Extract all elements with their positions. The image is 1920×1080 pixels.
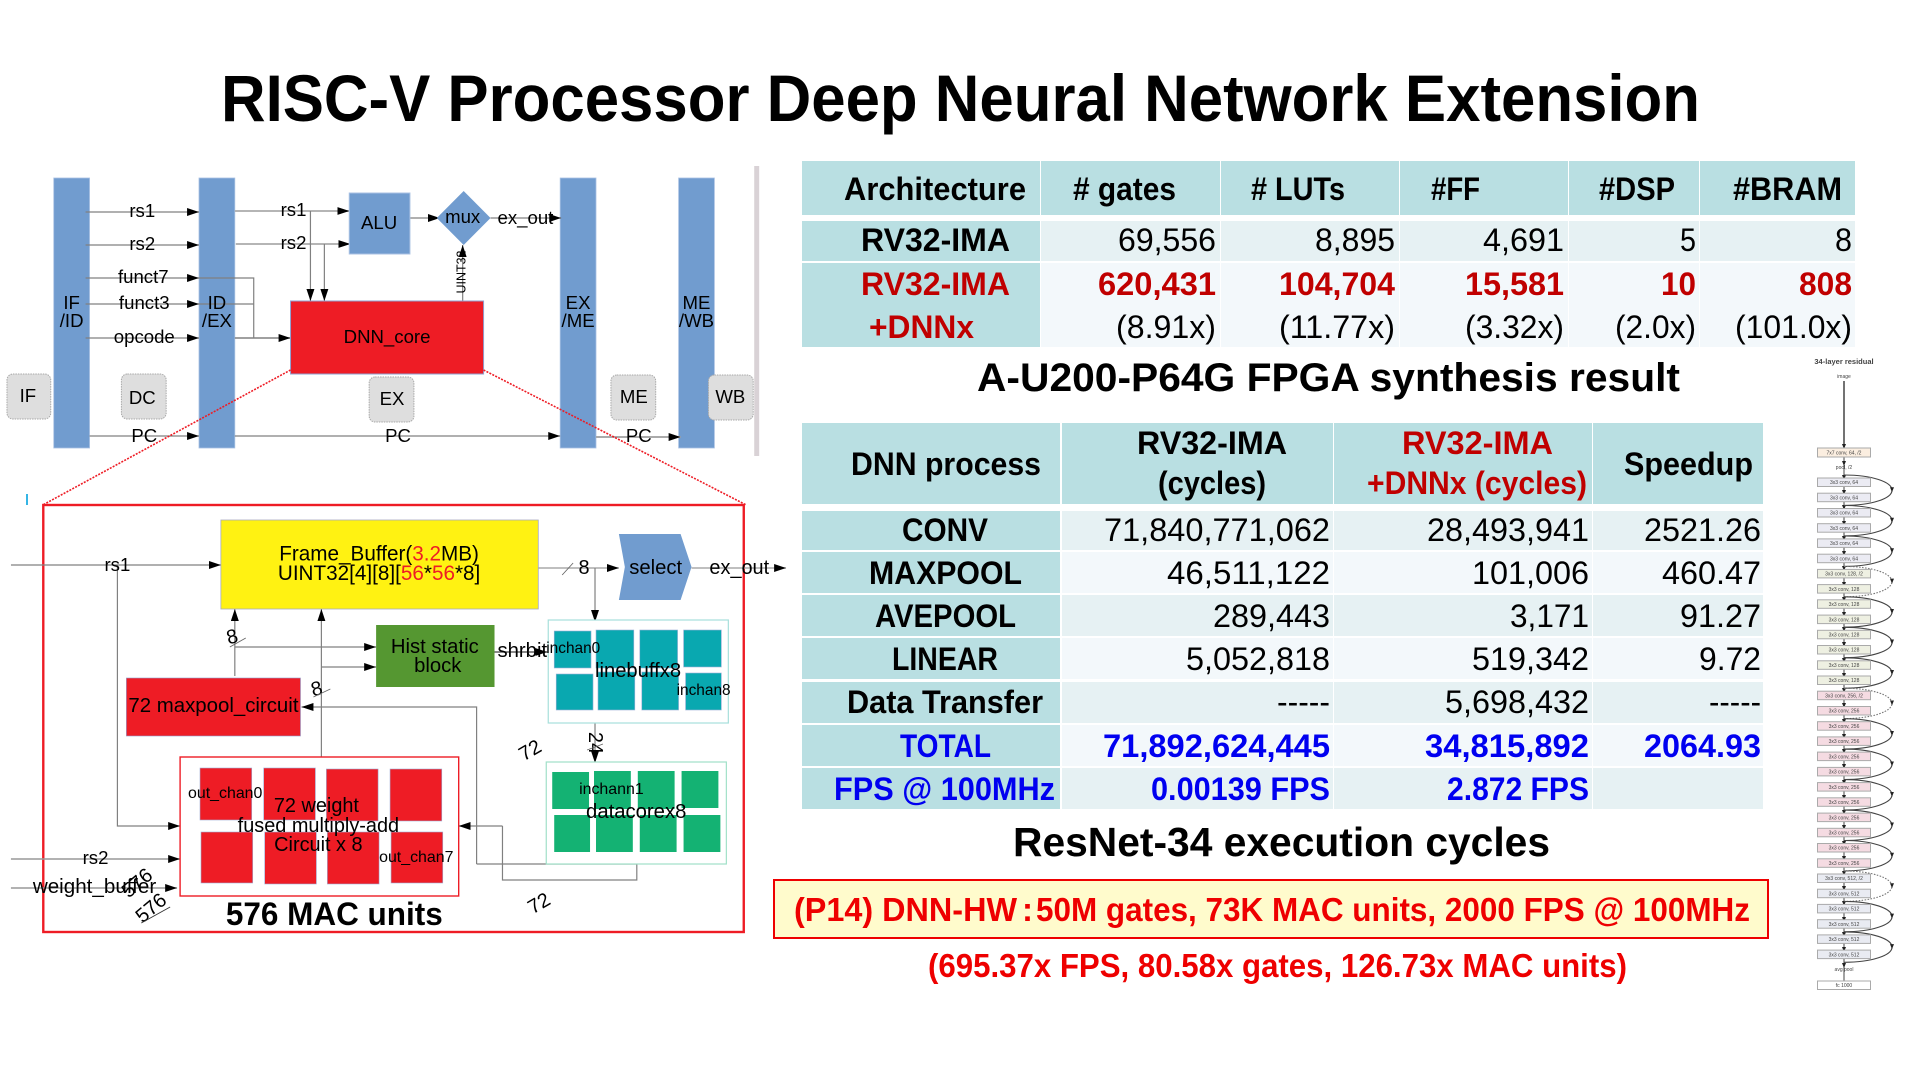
header text: # LUTs <box>1251 171 1345 207</box>
header text: +DNNx (cycles) <box>1367 465 1587 501</box>
hist static block: Hist static <box>391 636 479 658</box>
linebuff group: inchan0 <box>546 640 600 657</box>
speedup column: ----- <box>1709 684 1761 720</box>
RV32-IMA +DNNx row: RV32-IMA <box>861 266 1010 302</box>
ALU block <box>349 193 410 254</box>
pipeline labels: /WB <box>679 310 714 331</box>
pipeline labels: funct7 <box>118 266 169 287</box>
pipeline labels: rs2 <box>281 232 306 253</box>
resnet layer boxes: 3x3 conv, 256 <box>1829 800 1860 806</box>
RV32-IMA cycles column: 0.00139 FPS <box>1151 771 1330 807</box>
linebuff group: linebuffx8 <box>595 660 681 682</box>
resnet layer boxes: 3x3 conv, 256 <box>1829 830 1860 836</box>
shrbit label: shrbit <box>497 640 547 662</box>
DNNx cycles column: 101,006 <box>1472 555 1589 591</box>
hist static block <box>376 625 495 687</box>
outer red frame <box>43 505 744 932</box>
RV32-IMA row: RV32-IMA <box>861 222 1010 258</box>
row labels: LINEAR <box>892 641 998 677</box>
RV32-IMA +DNNx row: (2.0x) <box>1615 309 1696 345</box>
RV32-IMA cycles column: 5,052,818 <box>1186 641 1330 677</box>
body cells <box>1062 511 1763 809</box>
table header row <box>802 423 1763 504</box>
datacore group: datacorex8 <box>586 801 686 823</box>
pipeline labels: IF <box>63 292 80 313</box>
header text: #BRAM <box>1733 171 1842 207</box>
RV32-IMA row <box>861 222 1852 258</box>
header text: DNN process <box>851 446 1041 482</box>
pipeline labels: PC <box>131 425 157 446</box>
RV32-IMA row: 4,691 <box>1483 222 1564 258</box>
stage badges <box>7 374 753 422</box>
table header row <box>802 161 1855 215</box>
resnet layer boxes: 3x3 conv, 512 <box>1829 891 1860 897</box>
resnet layer boxes: 3x3 conv, 128 <box>1829 587 1860 593</box>
pipeline labels: ex_out <box>497 207 554 229</box>
RV32-IMA row: 8,895 <box>1315 222 1395 258</box>
row labels: FPS @ 100MHz <box>834 771 1055 807</box>
resnet layer boxes: 3x3 conv, 64 <box>1830 541 1858 547</box>
bus width annotations: 8 <box>224 625 240 649</box>
pipeline labels: ME <box>620 386 648 407</box>
resnet layer boxes: 3x3 conv, 512 <box>1829 922 1860 928</box>
row labels: Data Transfer <box>847 684 1043 720</box>
RV32-IMA +DNNx row: (8.91x) <box>1116 309 1216 345</box>
pipeline wires <box>86 211 681 437</box>
pipeline labels: /ME <box>562 310 595 331</box>
ResNet table caption: ResNet-34 execution cycles <box>1013 819 1550 865</box>
detail wires <box>11 565 786 888</box>
resnet layer boxes <box>1818 448 1870 990</box>
RV32-IMA row: 69,556 <box>1118 222 1216 258</box>
ex_out label: ex_out <box>709 557 770 579</box>
row labels: CONV <box>902 512 989 548</box>
title: RISC-V Processor Deep Neural Network Extension <box>221 61 1700 135</box>
bus width annotations: 72 <box>515 736 545 766</box>
resnet layer boxes: 3x3 conv, 256 <box>1829 785 1860 791</box>
input labels <box>32 554 157 898</box>
first column cells <box>802 511 1060 809</box>
speedup column: 2064.93 <box>1644 728 1761 764</box>
bus width annotations: 576 <box>118 864 157 903</box>
header text: #DSP <box>1599 171 1675 207</box>
pipeline labels: IF <box>20 385 36 406</box>
row labels <box>834 512 1055 807</box>
resnet layer boxes: 3x3 conv, 256, /2 <box>1825 693 1863 699</box>
pipeline labels: ID <box>208 292 226 313</box>
header text <box>851 425 1753 501</box>
MAC circuit group <box>180 757 459 896</box>
DNNx cycles column: 34,815,892 <box>1425 728 1589 764</box>
RV32-IMA +DNNx row: 10 <box>1661 266 1696 302</box>
speedup column: 91.27 <box>1680 598 1761 634</box>
datacore group: inchann1 <box>579 781 644 798</box>
pipeline labels: WB <box>715 386 745 407</box>
speedup column: 9.72 <box>1699 641 1761 677</box>
RV32-IMA +DNNx row: (101.0x) <box>1735 309 1852 345</box>
resnet layer boxes: pool, /2 <box>1836 465 1852 471</box>
input labels: weight_buffer <box>32 876 157 898</box>
frame buffer block: UINT32[4][8][56*56*8] <box>278 562 480 585</box>
header text: Speedup <box>1624 446 1753 482</box>
callout: P14 DNN-HW: 50M gates, 73K MAC units, 2000 FPS @ 100MHz <box>1036 891 1750 928</box>
row labels: MAXPOOL <box>869 555 1022 591</box>
pipeline labels: PC <box>385 425 411 446</box>
ResNet-34 cycles table <box>802 423 1763 809</box>
callout: P14 DNN-HW <box>774 880 1768 938</box>
RV32-IMA cycles column: 71,892,624,445 <box>1103 728 1330 764</box>
frame buffer block: Frame_Buffer(3.2MB) <box>279 542 479 566</box>
DNNx cycles column: 28,493,941 <box>1427 512 1589 548</box>
header text: # gates <box>1073 171 1176 207</box>
RV32-IMA +DNNx row <box>861 266 1852 345</box>
callout: P14 DNN-HW: : <box>1022 891 1033 928</box>
pipeline labels: rs1 <box>129 200 155 221</box>
frame buffer block <box>221 520 538 609</box>
resnet layer boxes: 3x3 conv, 256 <box>1829 709 1860 715</box>
resnet layer boxes: 3x3 conv, 256 <box>1829 815 1860 821</box>
RV32-IMA cycles column: 71,840,771,062 <box>1104 512 1330 548</box>
resnet layer boxes: 3x3 conv, 256 <box>1829 846 1860 852</box>
RV32-IMA row: 8 <box>1835 222 1852 258</box>
resnet layer boxes: 3x3 conv, 512, /2 <box>1825 876 1863 882</box>
resnet layer boxes: 3x3 conv, 128 <box>1829 617 1860 623</box>
resnet layer boxes: 3x3 conv, 128 <box>1829 663 1860 669</box>
DNNx cycles column: 2.872 FPS <box>1447 771 1589 807</box>
header text: (cycles) <box>1158 465 1266 501</box>
first column cells <box>802 221 1040 347</box>
input labels: rs2 <box>83 847 108 868</box>
pipeline labels <box>20 199 745 446</box>
select chevron <box>619 534 692 600</box>
resnet layer boxes: 3x3 conv, 64 <box>1830 480 1858 486</box>
linebuff group: inchan8 <box>677 682 731 699</box>
header text: RV32-IMA <box>1137 425 1287 461</box>
resnet layer boxes: 3x3 conv, 64 <box>1830 556 1858 562</box>
panel: ResNet-34 architecture <box>1814 357 1892 990</box>
select chevron: select <box>629 557 683 579</box>
cyan tick <box>26 494 28 505</box>
RV32-IMA row: 5 <box>1680 222 1696 258</box>
resnet layer boxes: 7x7 conv, 64, /2 <box>1827 450 1862 456</box>
resnet layer boxes: avg pool <box>1835 967 1853 973</box>
speedup column <box>1644 512 1761 764</box>
MAC circuit group: out_chan7 <box>379 849 454 866</box>
pipeline labels: ALU <box>361 212 397 233</box>
resnet layer boxes: 3x3 conv, 256 <box>1829 770 1860 776</box>
speedup column: 460.47 <box>1662 555 1761 591</box>
DNNx cycles column: 3,171 <box>1510 598 1589 634</box>
datacore group <box>546 762 726 864</box>
panel: pipeline diagram <box>7 166 759 456</box>
pipeline labels: /ID <box>60 310 84 331</box>
resnet layer boxes: 3x3 conv, 512 <box>1829 937 1860 943</box>
resnet image label: image <box>1837 374 1851 380</box>
pipeline register bars <box>54 178 714 448</box>
resnet layer boxes: 3x3 conv, 256 <box>1829 861 1860 867</box>
bus width annotations: 24 <box>584 732 606 754</box>
pipeline labels: ME <box>683 292 710 313</box>
MAC units caption: 576 MAC units <box>226 896 443 932</box>
RV32-IMA +DNNx row: (3.32x) <box>1465 309 1564 345</box>
DNNx cycles column <box>1425 512 1589 807</box>
RV32-IMA +DNNx row: 104,704 <box>1279 266 1395 302</box>
MAC circuit group: out_chan0 <box>188 785 263 802</box>
header text: #FF <box>1431 171 1480 207</box>
pipeline labels: EX <box>380 388 405 409</box>
header text <box>844 171 1842 207</box>
RV32-IMA cycles column <box>1103 512 1330 807</box>
row labels: TOTAL <box>900 728 991 764</box>
panel: DNN_core detail <box>11 505 786 932</box>
body cells <box>1041 221 1855 347</box>
RV32-IMA cycles column: ----- <box>1277 684 1330 720</box>
bus width annotations: 8 <box>579 557 590 579</box>
hist static block: block <box>414 655 462 677</box>
speedup column: 2521.26 <box>1644 512 1761 548</box>
RV32-IMA +DNNx row: 620,431 <box>1098 266 1216 302</box>
mux diamond <box>437 191 491 245</box>
RV32-IMA +DNNx row: +DNNx <box>869 309 974 345</box>
resnet heading: 34-layer residual <box>1814 357 1874 366</box>
pipeline labels: rs2 <box>129 233 155 254</box>
DNNx cycles column: 5,698,432 <box>1445 684 1589 720</box>
resnet layer boxes: 3x3 conv, 128, /2 <box>1825 572 1863 578</box>
pipeline labels: PC <box>626 425 652 446</box>
pipeline labels: funct3 <box>119 292 170 313</box>
maxpool circuit block: 72 maxpool_circuit <box>128 695 299 717</box>
resnet layer boxes: 3x3 conv, 128 <box>1829 602 1860 608</box>
RV32-IMA +DNNx row: 15,581 <box>1465 266 1564 302</box>
bus width annotations: 72 <box>524 889 554 919</box>
RV32-IMA +DNNx row: (11.77x) <box>1279 309 1395 345</box>
resnet layer boxes: 3x3 conv, 512 <box>1829 907 1860 913</box>
pipeline labels: /EX <box>202 310 232 331</box>
input labels: rs1 <box>104 554 130 575</box>
resnet layer boxes: 3x3 conv, 128 <box>1829 632 1860 638</box>
header text: RV32-IMA <box>1402 425 1553 461</box>
RV32-IMA cycles column: 289,443 <box>1213 598 1330 634</box>
bus width annotations: 576 <box>132 889 171 928</box>
pipeline labels: rs1 <box>281 199 306 220</box>
linebuff group <box>546 620 731 723</box>
FPGA table caption: A-U200-P64G FPGA synthesis result <box>977 356 1680 400</box>
row labels: AVEPOOL <box>875 598 1016 634</box>
bus width annotations: 8 <box>309 677 325 701</box>
resnet layer boxes: 3x3 conv, 64 <box>1830 526 1858 532</box>
pipeline labels: UINT32 <box>455 250 469 294</box>
pipeline labels: DC <box>129 387 156 408</box>
resnet layer boxes: 3x3 conv, 64 <box>1830 511 1858 517</box>
bus width annotations <box>118 557 606 928</box>
header text: Architecture <box>844 171 1026 207</box>
resnet layer boxes: 3x3 conv, 256 <box>1829 724 1860 730</box>
right separator <box>754 166 759 456</box>
pipeline labels: EX <box>566 292 591 313</box>
callout: ratios: (695.37x FPS, 80.58x gates, 126.73x MAC units) <box>928 947 1627 984</box>
resnet layer boxes: 3x3 conv, 512 <box>1829 952 1860 958</box>
resnet layer boxes: fc 1000 <box>1836 983 1852 989</box>
resnet layer boxes: 3x3 conv, 128 <box>1829 648 1860 654</box>
FPGA synthesis table <box>802 161 1855 347</box>
zoom connector lines <box>43 370 746 505</box>
pipeline labels: DNN_core <box>344 326 430 348</box>
MAC circuit group: Circuit x 8 <box>274 834 363 856</box>
callout: P14 DNN-HW: (P14) DNN-HW <box>794 891 1018 928</box>
MAC circuit group: fused multiply-add <box>238 815 399 837</box>
resnet main spine <box>1843 381 1845 981</box>
resnet layer boxes: 3x3 conv, 64 <box>1830 495 1858 501</box>
DNNx cycles column: 519,342 <box>1472 641 1589 677</box>
RV32-IMA cycles column: 46,511,122 <box>1167 555 1330 591</box>
pipeline labels: opcode <box>114 326 175 347</box>
RV32-IMA +DNNx row: 808 <box>1799 266 1852 302</box>
MAC circuit group: 72 weight <box>274 795 359 817</box>
resnet skip connections <box>1844 475 1892 962</box>
DNN_core block <box>291 301 484 374</box>
resnet layer boxes: 3x3 conv, 128 <box>1829 678 1860 684</box>
maxpool circuit block <box>126 678 300 736</box>
pipeline labels: mux <box>445 206 481 227</box>
resnet layer boxes: 3x3 conv, 256 <box>1829 754 1860 760</box>
resnet layer boxes: 3x3 conv, 256 <box>1829 739 1860 745</box>
